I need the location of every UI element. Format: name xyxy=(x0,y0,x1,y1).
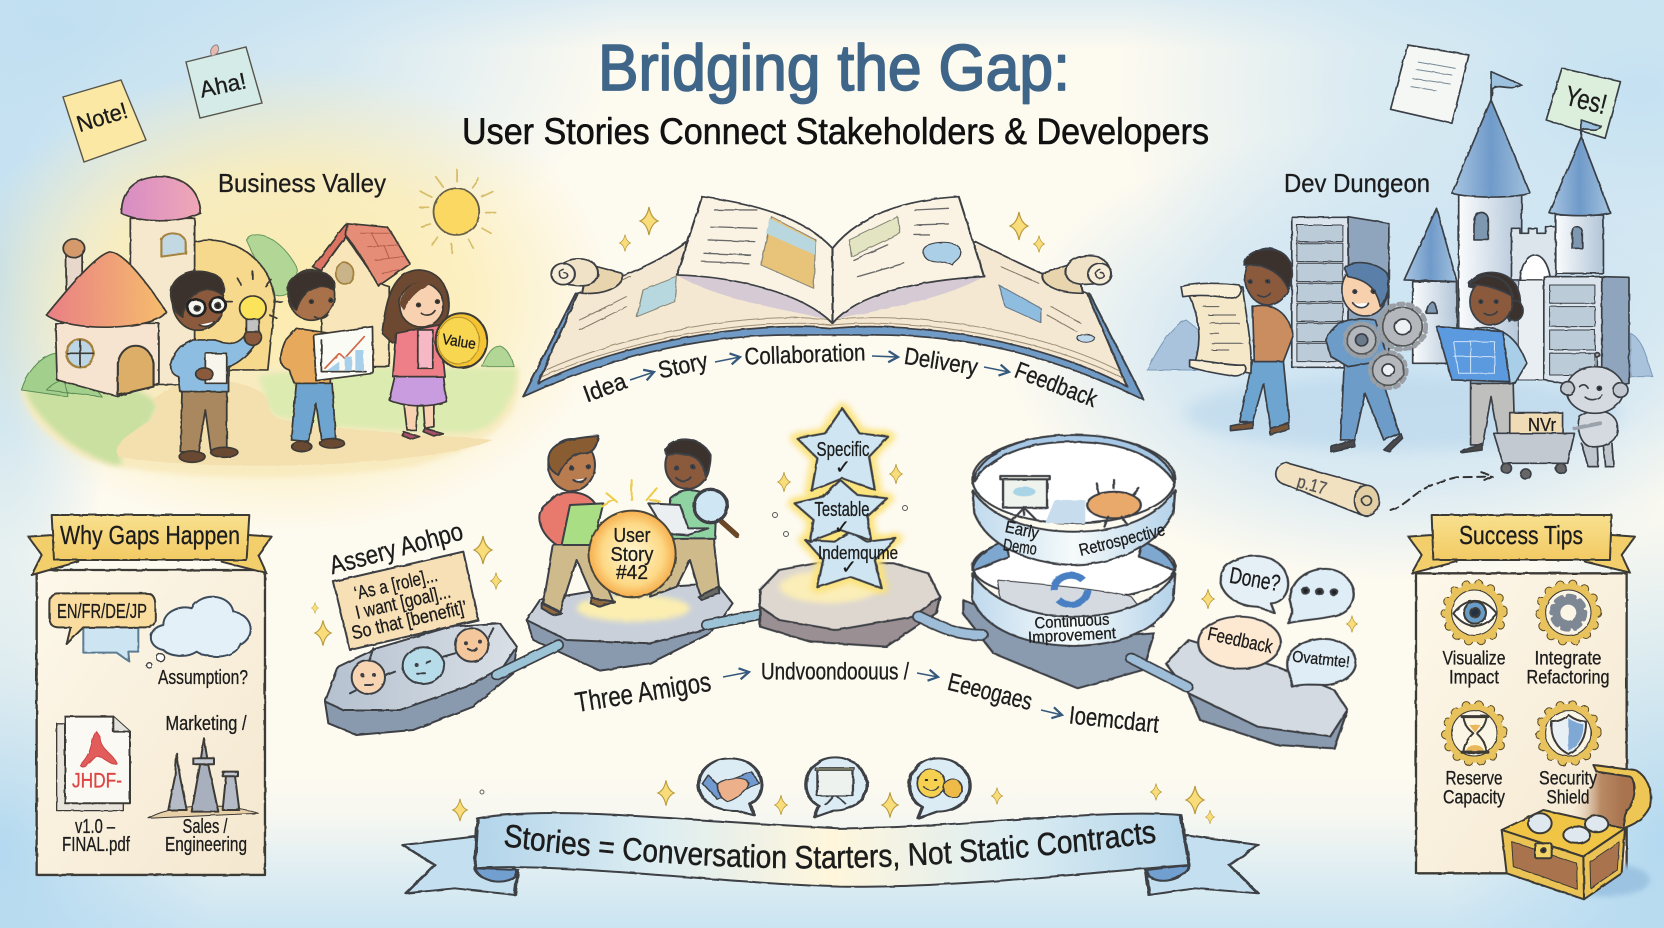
tip labels xyxy=(1442,648,1610,808)
user story template text: ‘As a [role]... xyxy=(352,565,440,605)
assumption label: Assumption? xyxy=(158,667,248,689)
treasure chest xyxy=(1502,764,1651,899)
subtitle: User Stories Connect Stakeholders & Developers xyxy=(462,111,1209,152)
coin label: Value xyxy=(441,331,477,353)
character: blueprint person xyxy=(1437,272,1527,453)
ring labels: Retrospective xyxy=(1077,520,1167,560)
flow text: idea to feedback: Idea xyxy=(580,368,631,408)
silo label bottom: Sales / xyxy=(182,816,228,838)
ring labels: Improvement xyxy=(1028,625,1117,647)
stone 1 xyxy=(325,623,517,735)
process flow text: Ioemcdart xyxy=(1068,701,1160,739)
scene: Dev Dungeon xyxy=(1147,45,1653,516)
user story template sign xyxy=(333,552,478,650)
ring labels: Demo xyxy=(1002,535,1038,559)
tip labels: Visualize xyxy=(1442,648,1506,670)
connector 2 fill xyxy=(707,612,773,625)
user story template text: So that [benefit]’ xyxy=(350,597,469,644)
right developer xyxy=(648,439,737,600)
towers icon xyxy=(148,738,258,818)
character: gears person xyxy=(1326,263,1426,452)
chest-side labels: Security xyxy=(1539,768,1597,790)
panel: Why Gaps Happen xyxy=(28,515,272,875)
castle and team illustration xyxy=(1147,45,1653,516)
user story badge text xyxy=(610,525,654,584)
tip labels: Integrate xyxy=(1534,648,1602,670)
character: chart person xyxy=(281,270,373,452)
user story badge text: Story xyxy=(610,544,654,566)
file label: v1.0 – xyxy=(75,816,116,838)
sparkles xyxy=(311,536,501,646)
mushroom tower xyxy=(121,177,201,385)
ribbon and icons xyxy=(403,757,1258,895)
label: Dev Dungeon xyxy=(1284,168,1430,198)
note: Aha! xyxy=(186,45,262,118)
cart box label: NVr xyxy=(1528,415,1556,435)
process flow text xyxy=(573,658,1160,739)
panel: Success Tips xyxy=(1408,515,1651,899)
tip labels: Refactoring xyxy=(1526,668,1610,688)
scroll p.17 backdrop xyxy=(1276,463,1379,516)
scroll label: p.17 xyxy=(1295,471,1329,499)
panel heading: Success Tips xyxy=(1459,520,1583,550)
process flow text: Eeeogaes xyxy=(945,668,1035,716)
INVEST stars xyxy=(794,408,896,588)
chest-side labels xyxy=(1539,768,1597,808)
silo label top: Marketing / xyxy=(166,713,247,735)
banner message: Stories = Conversation Starters, Not Static Contracts xyxy=(504,824,1156,871)
bubble labels: Ovatmte! xyxy=(1291,649,1351,671)
file label: FINAL.pdf xyxy=(62,834,130,856)
bottom banner xyxy=(401,756,1260,896)
pdf mark: JHDF- xyxy=(72,770,122,792)
yellow dome xyxy=(195,240,275,370)
right curled scroll xyxy=(1042,256,1112,293)
character: idea person xyxy=(171,271,282,462)
badge: gear xyxy=(1539,583,1598,642)
flow text: idea to feedback: Delivery xyxy=(902,343,980,381)
bubble labels: Feedback xyxy=(1206,624,1275,658)
dashed arrow xyxy=(1391,472,1493,510)
star labels: Indemqume xyxy=(818,543,898,563)
stones and characters xyxy=(325,436,773,735)
speech bubbles xyxy=(1198,556,1356,687)
left house xyxy=(46,239,166,397)
panel art xyxy=(1408,515,1635,873)
sun xyxy=(420,170,496,253)
flow text: idea to feedback: Story xyxy=(656,348,710,384)
paper note xyxy=(1391,45,1469,123)
open book illustration xyxy=(523,197,1144,400)
stepping stones left: template and three amigos xyxy=(311,436,773,735)
stone 2 xyxy=(527,583,733,671)
icon: board bubble xyxy=(806,757,867,817)
stone 5 xyxy=(1166,640,1347,748)
central book xyxy=(523,197,1144,413)
bubble labels: Done? xyxy=(1228,562,1282,596)
scene: Business Valley xyxy=(21,168,519,477)
panel art xyxy=(28,515,272,875)
note: Yes backdrop xyxy=(1546,68,1620,138)
left curled scroll xyxy=(551,259,623,293)
user story template text xyxy=(341,560,469,644)
note: Note! xyxy=(63,80,146,162)
PDF document icon xyxy=(57,717,130,811)
user story badge text: User xyxy=(614,525,651,547)
flow text: idea to feedback: Collaboration xyxy=(744,339,866,371)
village illustration xyxy=(21,170,519,477)
icon: handshake bubble xyxy=(699,758,762,815)
banner xyxy=(28,515,272,575)
sticky notes left xyxy=(63,45,262,162)
silo label bottom: Engineering xyxy=(165,834,247,856)
ring labels: Early xyxy=(1003,517,1041,543)
note: Note!: Note! xyxy=(73,97,131,137)
star labels: ✓ xyxy=(835,458,851,478)
right house xyxy=(312,223,410,367)
process flow text: Three Amigos xyxy=(573,666,713,718)
left developer xyxy=(539,436,615,615)
character: value person xyxy=(382,270,487,439)
user story glow circle xyxy=(589,480,676,597)
ribbon body xyxy=(475,813,1189,887)
flow text: idea to feedback: Feedback xyxy=(1011,357,1102,413)
ring labels: Continuous xyxy=(1034,612,1110,632)
connectors xyxy=(919,617,1187,687)
ribbon tails xyxy=(403,835,1258,895)
assumption cloud xyxy=(147,597,251,668)
note label: Yes!: Yes! xyxy=(1562,80,1610,120)
title: Bridging the Gap: xyxy=(598,31,1070,104)
character: scroll holder xyxy=(1181,248,1293,435)
sparkles xyxy=(620,207,1044,252)
star labels: ✓ xyxy=(841,558,857,578)
panel heading: Why Gaps Happen xyxy=(60,520,240,550)
bubble labels xyxy=(1206,562,1351,671)
process flow text: Undvoondoouus / xyxy=(761,658,909,686)
connector 2 xyxy=(707,612,773,625)
banner xyxy=(1408,515,1635,573)
speech bubbles xyxy=(49,593,155,662)
star labels xyxy=(814,439,898,578)
label: Business Valley xyxy=(218,168,386,198)
rings xyxy=(972,435,1175,646)
ring labels xyxy=(1002,517,1167,647)
stepping stones right: invest stars, rings, feedback xyxy=(573,408,1357,748)
connector 1 xyxy=(497,645,558,675)
server racks xyxy=(1292,217,1629,390)
badge: hourglass xyxy=(1445,704,1504,763)
badge: shield xyxy=(1539,704,1598,763)
badge: eye xyxy=(1445,583,1504,642)
robot with cart xyxy=(1494,353,1628,479)
user story badge text: #42 xyxy=(616,562,648,584)
character blobs xyxy=(350,628,493,694)
user story template text: I want [goal]... xyxy=(354,582,453,624)
stones, stars, rings, bubbles xyxy=(760,408,1356,748)
flow text: idea to feedback xyxy=(580,339,1102,413)
star labels: ✓ xyxy=(834,518,850,538)
silo label bottom xyxy=(165,816,247,856)
sparkles xyxy=(772,464,1357,632)
star labels: Specific xyxy=(816,439,870,461)
stone 4 xyxy=(963,600,1154,688)
tip labels: Capacity xyxy=(1443,788,1505,808)
sparkles xyxy=(453,780,1214,824)
tip labels: Reserve xyxy=(1446,768,1502,790)
icon: faces bubble xyxy=(909,758,970,818)
tip labels: Impact xyxy=(1449,668,1500,688)
stone 3 xyxy=(760,562,940,647)
file label xyxy=(62,816,130,856)
chest-side labels: Shield xyxy=(1546,788,1590,808)
note: Aha!: Aha! xyxy=(197,67,249,103)
star labels: Testable xyxy=(814,499,870,521)
heading on template: Assery Aohpo xyxy=(326,516,466,580)
language label: EN/FR/DE/JP xyxy=(57,601,147,623)
connector 1 fill xyxy=(497,645,558,675)
castle xyxy=(1404,72,1610,380)
